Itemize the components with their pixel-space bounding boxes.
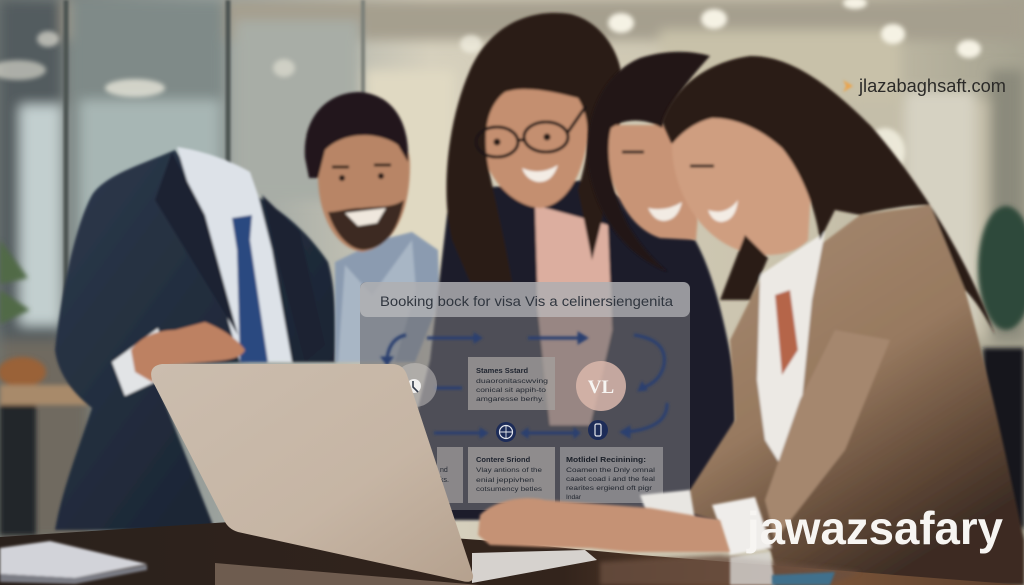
box: Stames Sstard: conical sit appih-to: [476, 387, 546, 394]
box: Motlidel Reclaining: Motlidel Recinining:: [566, 455, 646, 464]
circle: VL: [576, 361, 626, 411]
person: woman in middle: [587, 52, 710, 272]
box: Contere Sriond: Contere Sriond: [476, 455, 531, 464]
box: Stames Sstard: duaoronitascwving: [476, 378, 548, 385]
hands on laptop: [478, 498, 730, 552]
box: left partial: ks.: [440, 477, 449, 484]
brand wordmark: jawazsafary: [746, 502, 1003, 554]
box: Motlidel Reclaining: caaet coad i and the feal: [566, 476, 656, 483]
table: [0, 522, 1024, 585]
laptop lid: [151, 364, 473, 582]
person: man in navy suit: [55, 147, 336, 530]
box: Contere Sriond: Vlay antions of the: [476, 467, 542, 474]
cuff and hand: [112, 328, 170, 396]
papers on table: [0, 541, 147, 584]
panel title bar: Booking bock for visa Vis a celinersiengenita: [380, 293, 673, 309]
website label: jlazabaghsaft.com: [858, 76, 1006, 96]
box: Stames Sstard: amgaresse berhy.: [476, 396, 544, 403]
panel title bar: [360, 282, 690, 317]
box: Motlidel Reclaining: Indar: [566, 494, 582, 501]
box: Contere Sriond: [468, 447, 555, 503]
person: woman with glasses: [415, 13, 735, 520]
translucent process panel: [360, 282, 690, 510]
box: Motlidel Reclaining: rearites ergiend oft pigr: [566, 485, 653, 492]
box: Motlidel Reclaining: Coamen the Dnly omnal: [566, 467, 656, 474]
plants and furniture: [0, 206, 1024, 535]
person: woman in tan blazer: [660, 56, 1024, 585]
laptop: [151, 364, 597, 583]
laptop base: [472, 550, 597, 583]
box: Contere Sriond: cotsumency betles: [476, 486, 543, 493]
box: left partial: [437, 447, 463, 503]
lapel: [155, 152, 238, 335]
person: smiling man: [305, 92, 440, 362]
arrows: [381, 332, 667, 438]
ceiling lights: [0, 0, 981, 176]
box: Contere Sriond: enial jeppivhen: [476, 477, 534, 484]
icon: globe: [496, 422, 516, 442]
glass frames: [66, 0, 363, 340]
cuffs: [640, 490, 772, 555]
box: Stames Sstard: Stames Sstard: [476, 366, 529, 375]
circle: VL: VL: [588, 377, 614, 398]
box: Stames Sstard: [468, 357, 555, 410]
shirt and tie: [177, 147, 292, 362]
box: Motlidel Reclaining: [560, 447, 663, 503]
box: left partial: nd: [440, 467, 448, 474]
glasses: [476, 106, 586, 157]
circle: left icon: [393, 363, 437, 407]
icon: phone: [588, 420, 608, 440]
eyes: [332, 165, 391, 167]
